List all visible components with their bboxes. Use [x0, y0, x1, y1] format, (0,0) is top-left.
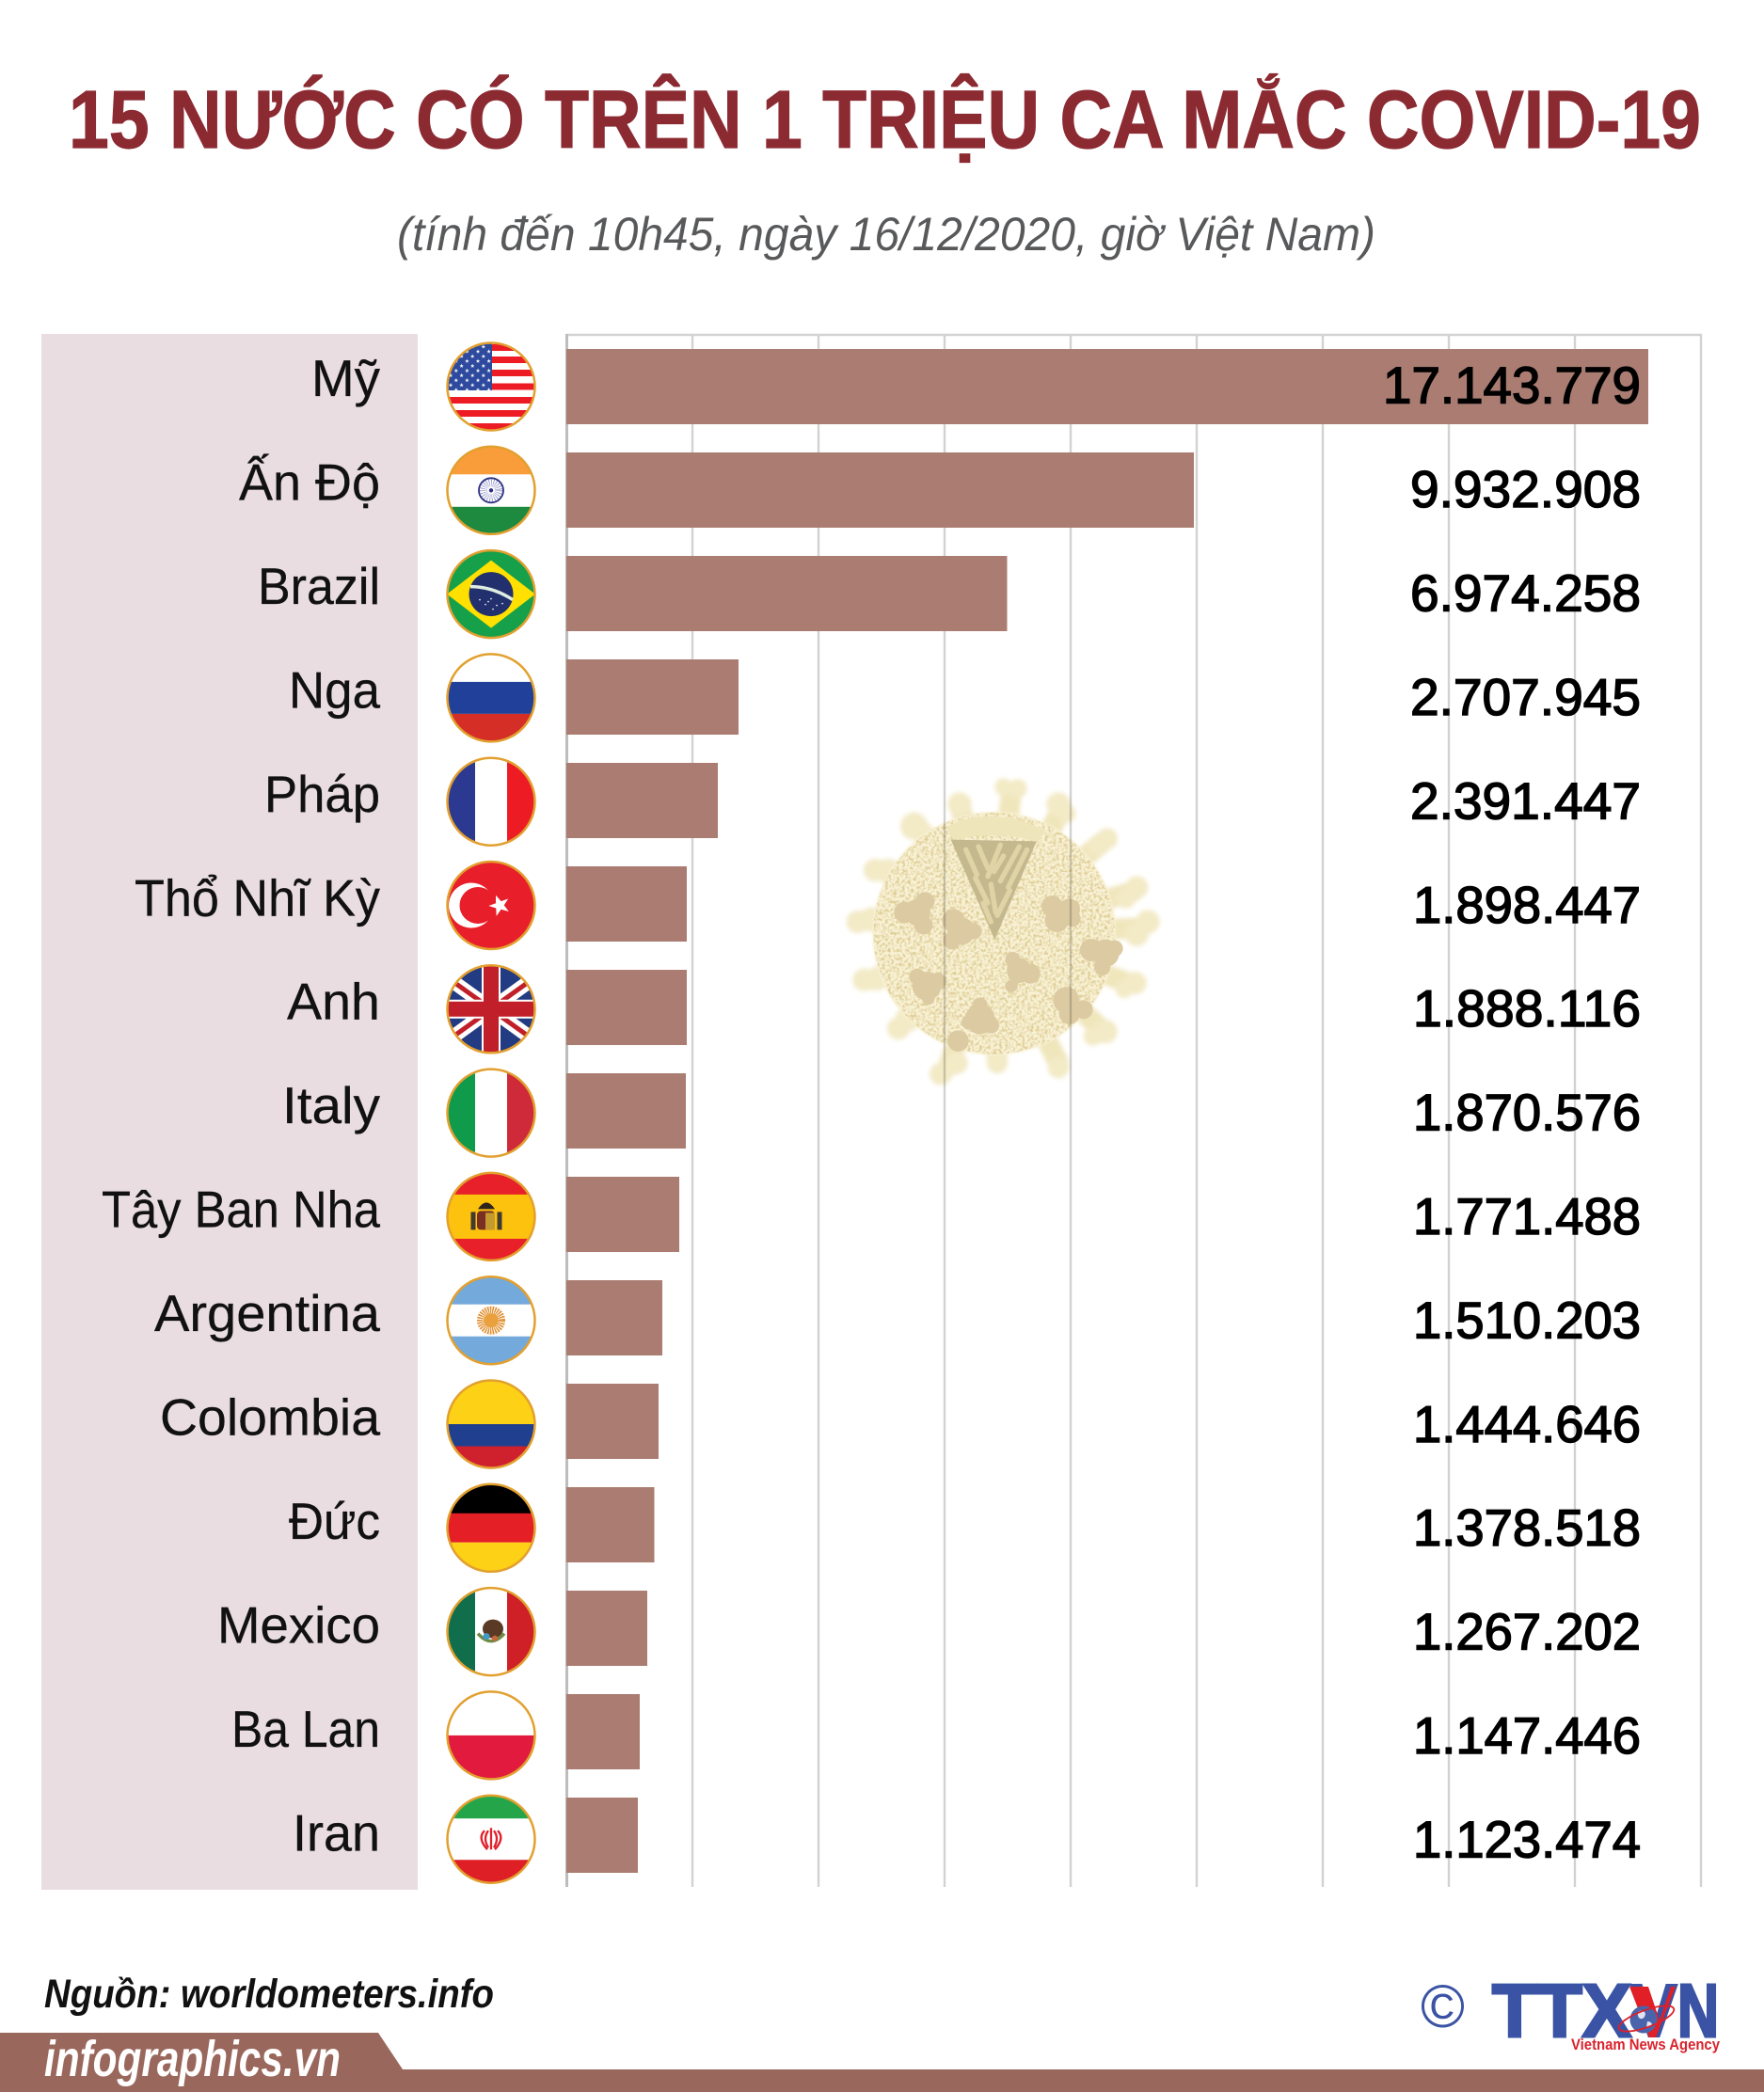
value: 1.771.488 — [1413, 1187, 1641, 1245]
label: Ấn Độ — [239, 453, 380, 512]
value: 1.510.203 — [1413, 1291, 1641, 1349]
label: Argentina — [154, 1284, 380, 1342]
label: Colombia — [160, 1388, 380, 1447]
bar — [566, 1280, 662, 1355]
label: Thổ Nhĩ Kỳ — [135, 868, 380, 927]
footer site name: infographics.vn — [44, 2031, 341, 2087]
label: Iran — [293, 1803, 380, 1862]
flag: France — [447, 757, 535, 846]
bar — [566, 1177, 679, 1252]
bar — [566, 1384, 659, 1459]
value: 1.123.474 — [1413, 1810, 1641, 1868]
value: 6.974.258 — [1410, 564, 1641, 623]
row: Thổ Nhĩ Kỳ — [135, 862, 1641, 950]
label: Mexico — [217, 1595, 380, 1654]
label: Nga — [289, 660, 380, 719]
bar — [566, 659, 739, 735]
value: 9.932.908 — [1410, 460, 1641, 518]
row: Đức — [289, 1483, 1641, 1573]
row: Mỹ — [311, 342, 1648, 431]
bar — [566, 866, 687, 942]
flag: UK — [447, 965, 535, 1054]
source note: Nguồn: worldometers.info — [44, 1972, 494, 2017]
value: 17.143.779 — [1383, 356, 1641, 414]
row: Ấn Độ — [239, 446, 1641, 535]
footer band — [0, 2031, 1764, 2092]
flag: Russia — [447, 654, 535, 742]
bar — [566, 970, 687, 1045]
value: 1.378.518 — [1413, 1498, 1641, 1557]
row: Anh — [287, 965, 1641, 1054]
row: Italy — [282, 1069, 1641, 1157]
row: Ba Lan — [231, 1691, 1641, 1780]
bar — [566, 349, 1648, 424]
row: Brazil — [258, 550, 1641, 639]
flag: Spain — [447, 1172, 535, 1260]
row: Pháp — [264, 757, 1641, 846]
bar — [566, 1591, 647, 1666]
row: Colombia — [160, 1380, 1641, 1469]
logo letters: TTX — [1492, 1969, 1631, 2052]
flag: India — [447, 446, 535, 535]
copyright mark: © — [1421, 1973, 1465, 2040]
logo tagline: Vietnam News Agency — [1571, 2036, 1720, 2053]
bar — [566, 763, 718, 838]
logo: TTXVN: V — [1630, 1969, 1677, 2052]
value: 1.444.646 — [1413, 1395, 1641, 1453]
label: Pháp — [264, 765, 380, 823]
value: 1.147.446 — [1413, 1706, 1641, 1765]
value: 1.888.116 — [1413, 979, 1641, 1038]
flag: Brazil — [447, 550, 535, 639]
value: 1.267.202 — [1413, 1603, 1641, 1661]
flag: Italy — [447, 1069, 535, 1157]
row: Iran — [293, 1795, 1641, 1883]
row: Nga — [289, 654, 1641, 742]
label: Italy — [282, 1076, 381, 1134]
flag: Mexico — [447, 1588, 535, 1676]
bar — [566, 1694, 640, 1769]
logo: TTXVN: N — [1677, 1969, 1719, 2052]
label: Tây Ban Nha — [102, 1181, 380, 1239]
bar — [566, 1073, 686, 1149]
subtitle: (tính đến 10h45, ngày 16/12/2020, giờ Việt Nam) — [397, 208, 1375, 261]
row: Tây Ban Nha — [102, 1172, 1641, 1260]
icon: coronavirus illustration — [847, 778, 1160, 1086]
flag: Turkey — [447, 862, 535, 950]
flag: Poland — [447, 1691, 535, 1780]
row: Argentina — [154, 1276, 1641, 1365]
label: Ba Lan — [231, 1700, 380, 1758]
flag: Colombia — [447, 1380, 535, 1469]
flag: Iran — [447, 1795, 535, 1883]
logo: TTXVN — [1421, 1969, 1720, 2053]
label: Anh — [287, 973, 380, 1031]
label: Brazil — [258, 557, 380, 615]
bar — [566, 556, 1007, 631]
bar — [566, 1487, 655, 1562]
value: 1.870.576 — [1413, 1084, 1641, 1142]
value: 2.707.945 — [1410, 668, 1641, 726]
flag: Germany — [447, 1483, 535, 1573]
row: Mexico — [217, 1588, 1641, 1676]
label: Mỹ — [311, 349, 380, 407]
bar — [566, 1798, 638, 1873]
flag: Argentina — [447, 1276, 535, 1365]
panel: country names background — [41, 334, 418, 1890]
value: 2.391.447 — [1410, 771, 1641, 830]
value: 1.898.447 — [1413, 876, 1641, 934]
bar — [566, 452, 1194, 528]
flag: USA — [447, 342, 535, 431]
label: Đức — [289, 1492, 380, 1550]
